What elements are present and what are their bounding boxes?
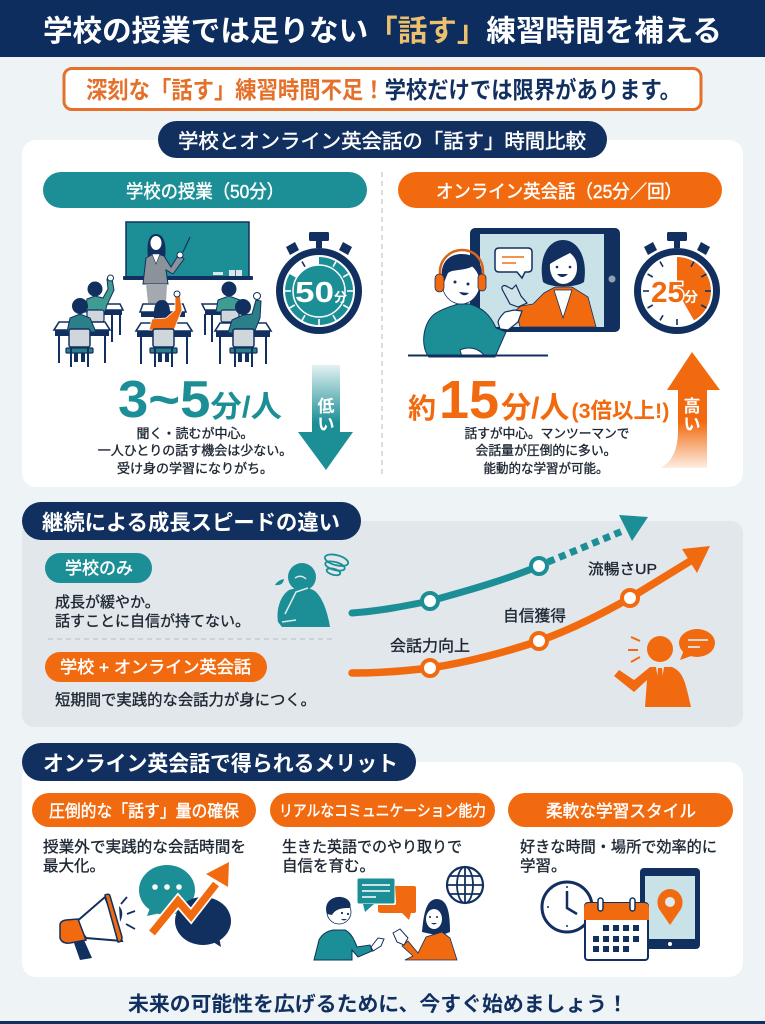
merit 3 text (520, 838, 717, 875)
stopwatch: 25 minutes: 25 (651, 277, 684, 309)
teacher on screen (502, 240, 596, 327)
merit 2 text (282, 838, 462, 875)
school column heading: 学校の授業（50分） (126, 181, 284, 202)
merit 1 heading (32, 793, 256, 827)
growth arrow (152, 885, 215, 933)
callout: shortage message (64, 68, 701, 110)
school only text (55, 594, 250, 630)
arrow: high: い (684, 415, 700, 434)
school description (98, 426, 292, 476)
front middle student (136, 291, 192, 367)
merits heading (22, 743, 416, 781)
panel: merits (22, 743, 743, 977)
arrow: low: い (318, 415, 334, 434)
stopwatch: 50 minutes: 分 (334, 290, 347, 305)
merit 2 heading: リアルなコミュニケーション能力 (279, 802, 486, 820)
title banner (0, 0, 765, 57)
blackboard (126, 222, 249, 277)
online description: 話すが中心。マンツーマンで (464, 426, 630, 441)
girl (393, 899, 457, 960)
icon: worried person (275, 552, 349, 627)
tablet (640, 868, 700, 949)
online column heading (398, 172, 722, 208)
speech bubble on screen (495, 248, 532, 278)
stopwatch: 25 minutes (638, 232, 716, 330)
footer call to action: 未来の可能性を広げるために、今すぐ始めましょう！ (128, 993, 628, 1016)
front left student (54, 298, 110, 367)
milestone labels: 流暢さUP (588, 561, 657, 578)
comparison heading (158, 121, 607, 158)
school plus online label (45, 652, 267, 682)
comparison heading: 学校とオンライン英会話の「話す」時間比較 (178, 130, 586, 153)
growth heading: 継続による成長スピードの違い (42, 511, 340, 535)
icon: conversation and globe (314, 867, 483, 960)
online description (464, 426, 630, 476)
merit 2 heading (270, 793, 495, 827)
illustration: online lesson (408, 228, 620, 357)
merit 3 text: 学習。 (520, 857, 567, 875)
orange line (352, 546, 710, 676)
merit 2 text: 生きた英語でのやり取りで (282, 838, 462, 856)
merit 2 text: 自信を育む。 (282, 857, 375, 875)
online column heading: オンライン英会話（25分／回） (436, 181, 682, 202)
callout: shortage message: 深刻な「話す」練習時間不足！学校だけでは限界があります。 (86, 76, 681, 103)
arrow: high: 高 (684, 396, 700, 416)
arrow: high (660, 352, 720, 468)
tablet (470, 228, 620, 332)
icon: confident speaker (614, 629, 715, 707)
back right student (202, 282, 243, 342)
merits heading: オンライン英会話で得られるメリット (43, 752, 398, 776)
title banner: 学校の授業では足りない「話す」練習時間を補える (43, 15, 722, 48)
desk line (408, 354, 548, 356)
calendar (584, 898, 649, 960)
school description: 受け身の学習になりがち。 (117, 461, 273, 476)
school only label: 学校のみ (65, 559, 133, 578)
merit 1 heading: 圧倒的な「話す」量の確保 (49, 802, 239, 821)
merit 1 text: 最大化。 (43, 857, 105, 875)
orange bubble (378, 886, 416, 920)
arrow: low: 低 (318, 397, 334, 416)
stopwatch: 25 minutes: 分 (684, 289, 698, 305)
arrow: low (298, 365, 353, 470)
navy bubble (175, 897, 231, 947)
big stat: 3-5 minutes per person: 3~5分/人 (118, 371, 282, 429)
merit 3 text: 好きな時間・場所で効率的に (520, 838, 717, 856)
growth heading (22, 502, 361, 540)
stopwatch: 50 minutes (280, 232, 358, 330)
big stat: about 15 minutes per person: 約15分/人(3倍以上!) (408, 370, 669, 430)
school only label (45, 553, 152, 583)
teacher (143, 234, 190, 303)
school only text: 話すことに自信が持てない。 (55, 613, 250, 630)
icon: clock, calendar, tablet (542, 868, 700, 960)
back left student (85, 275, 123, 342)
front right student (215, 292, 271, 367)
panel: growth speed (22, 502, 743, 727)
clock (542, 882, 592, 932)
student with headset (424, 250, 522, 357)
stopwatch: 50 minutes: 50 (295, 277, 334, 309)
school plus online text: 短期間で実践的な会話力が身につく。 (55, 692, 316, 709)
panel: comparison (22, 121, 743, 487)
illustration: classroom (54, 222, 271, 367)
school column heading (43, 172, 367, 208)
merit 3 heading: 柔軟な学習スタイル (546, 802, 696, 821)
back middle desk (140, 304, 186, 317)
chart: growth curves (352, 515, 710, 676)
teal line (352, 515, 648, 613)
school description: 一人ひとりの話す機会は少ない。 (98, 443, 292, 458)
milestone labels: 自信獲得 (503, 607, 566, 625)
boy (314, 897, 384, 960)
teal bubble (139, 865, 195, 916)
icon: megaphone and speech bubbles (60, 862, 231, 960)
merit 1 text (43, 838, 246, 875)
school only text: 成長が緩やか。 (55, 594, 160, 611)
milestone labels: 会話力向上 (390, 637, 470, 655)
online description: 能動的な学習が可能。 (484, 461, 608, 476)
school plus online label: 学校 + オンライン英会話 (60, 658, 251, 677)
milestone labels (390, 561, 657, 655)
online description: 会話量が圧倒的に多い。 (476, 443, 616, 458)
merit 3 heading (508, 793, 733, 827)
teal bubble (357, 878, 395, 912)
globe (447, 867, 483, 903)
merit 1 text: 授業外で実践的な会話時間を (43, 838, 246, 856)
school description: 聞く・読むが中心。 (136, 426, 254, 441)
